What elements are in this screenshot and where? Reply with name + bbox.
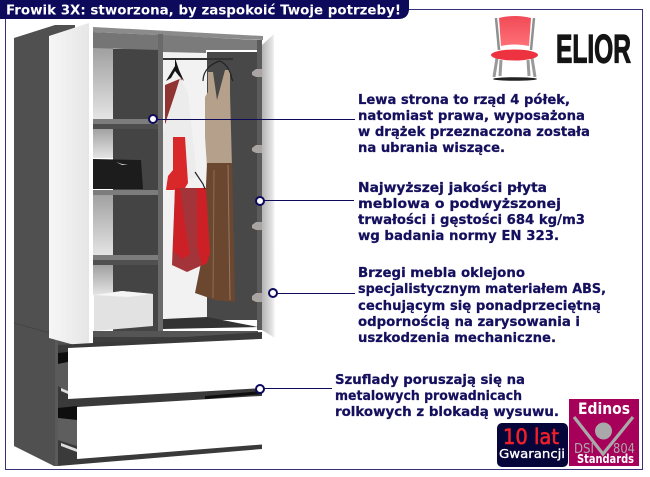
tan dress xyxy=(205,70,232,167)
leader line: edges xyxy=(269,289,355,297)
text block: board quality: meblowa o podwyższonej xyxy=(358,197,561,212)
brown dress lower xyxy=(195,163,235,302)
red skirt xyxy=(172,188,210,272)
text block: board quality: trwałości i gęstości 684 kg/m3 xyxy=(358,213,585,228)
text block: ABS edges: specjalistycznym materiałem ABS, xyxy=(358,282,606,297)
badge: Edinos standards: Standards xyxy=(577,452,634,466)
lower drawer cavity xyxy=(58,406,77,420)
text block: shelves and rail: natomiast prawa, wyposażona xyxy=(358,109,585,124)
upper drawer cavity xyxy=(58,352,68,364)
text block: board quality: Najwyższej jakości płyta xyxy=(358,181,547,196)
text block: board quality xyxy=(358,181,585,244)
text block: ABS edges: uszkodzenia mechaniczne. xyxy=(358,331,556,346)
badge: Edinos standards: Edinos xyxy=(578,399,630,418)
leader line: board quality xyxy=(256,197,354,205)
text block: shelves and rail: Lewa strona to rząd 4 półek, xyxy=(358,93,570,108)
black hanger xyxy=(166,58,184,81)
text block: ABS edges: odpornością na zarysowania i xyxy=(358,315,580,330)
wardrobe illustration xyxy=(14,23,293,466)
badge: Edinos standards xyxy=(569,399,639,466)
hinges xyxy=(252,69,263,302)
top panel xyxy=(93,27,263,40)
text block: drawers: Szuflady poruszają się na xyxy=(335,373,525,388)
badge: Edinos standards: DSI xyxy=(574,442,594,457)
text block: shelves and rail: na ubrania wiszące. xyxy=(358,141,505,156)
divider and right edge xyxy=(158,34,163,334)
badge: Edinos standards: 804 xyxy=(613,442,635,457)
hanging rail xyxy=(163,58,233,60)
lower drawer front xyxy=(77,394,293,459)
red bodice xyxy=(165,78,182,133)
text block: drawers: metalowych prowadnicach xyxy=(335,389,522,404)
logo: Elior chair xyxy=(491,16,631,81)
title bar: Frowik 3X: stworzona, by zaspokoić Twoje potrzeby! xyxy=(6,4,401,18)
leader line: shelves xyxy=(149,115,355,123)
floor and base xyxy=(163,317,258,329)
text block: board quality: wg badania normy EN 323. xyxy=(358,229,559,244)
badge: 10 year guarantee: Gwarancji xyxy=(499,447,565,461)
badge: 10 year guarantee xyxy=(497,423,568,467)
lower body xyxy=(58,332,262,466)
badge: 10 year guarantee: 10 lat xyxy=(503,425,559,449)
text block: ABS edges: Brzegi mebla oklejono xyxy=(358,266,525,281)
text block: shelves and rail: w drążek przeznaczona została xyxy=(358,125,590,140)
text block: ABS edges: cechującym się ponadprzeciętną xyxy=(358,299,601,314)
white box xyxy=(94,291,153,331)
leader line: drawers xyxy=(256,385,332,393)
upper drawer front xyxy=(68,338,282,399)
white shirt xyxy=(163,78,197,190)
text block: ABS edges xyxy=(358,266,606,346)
left door xyxy=(49,23,89,349)
side panel xyxy=(14,25,75,466)
text block: shelves and rail xyxy=(358,93,590,156)
text block: drawers xyxy=(335,373,559,420)
shelves xyxy=(93,119,158,124)
interior back xyxy=(93,27,263,346)
text block: drawers: rolkowych z blokadą wysuwu. xyxy=(335,405,559,420)
right door xyxy=(262,34,275,338)
black box xyxy=(93,159,143,189)
